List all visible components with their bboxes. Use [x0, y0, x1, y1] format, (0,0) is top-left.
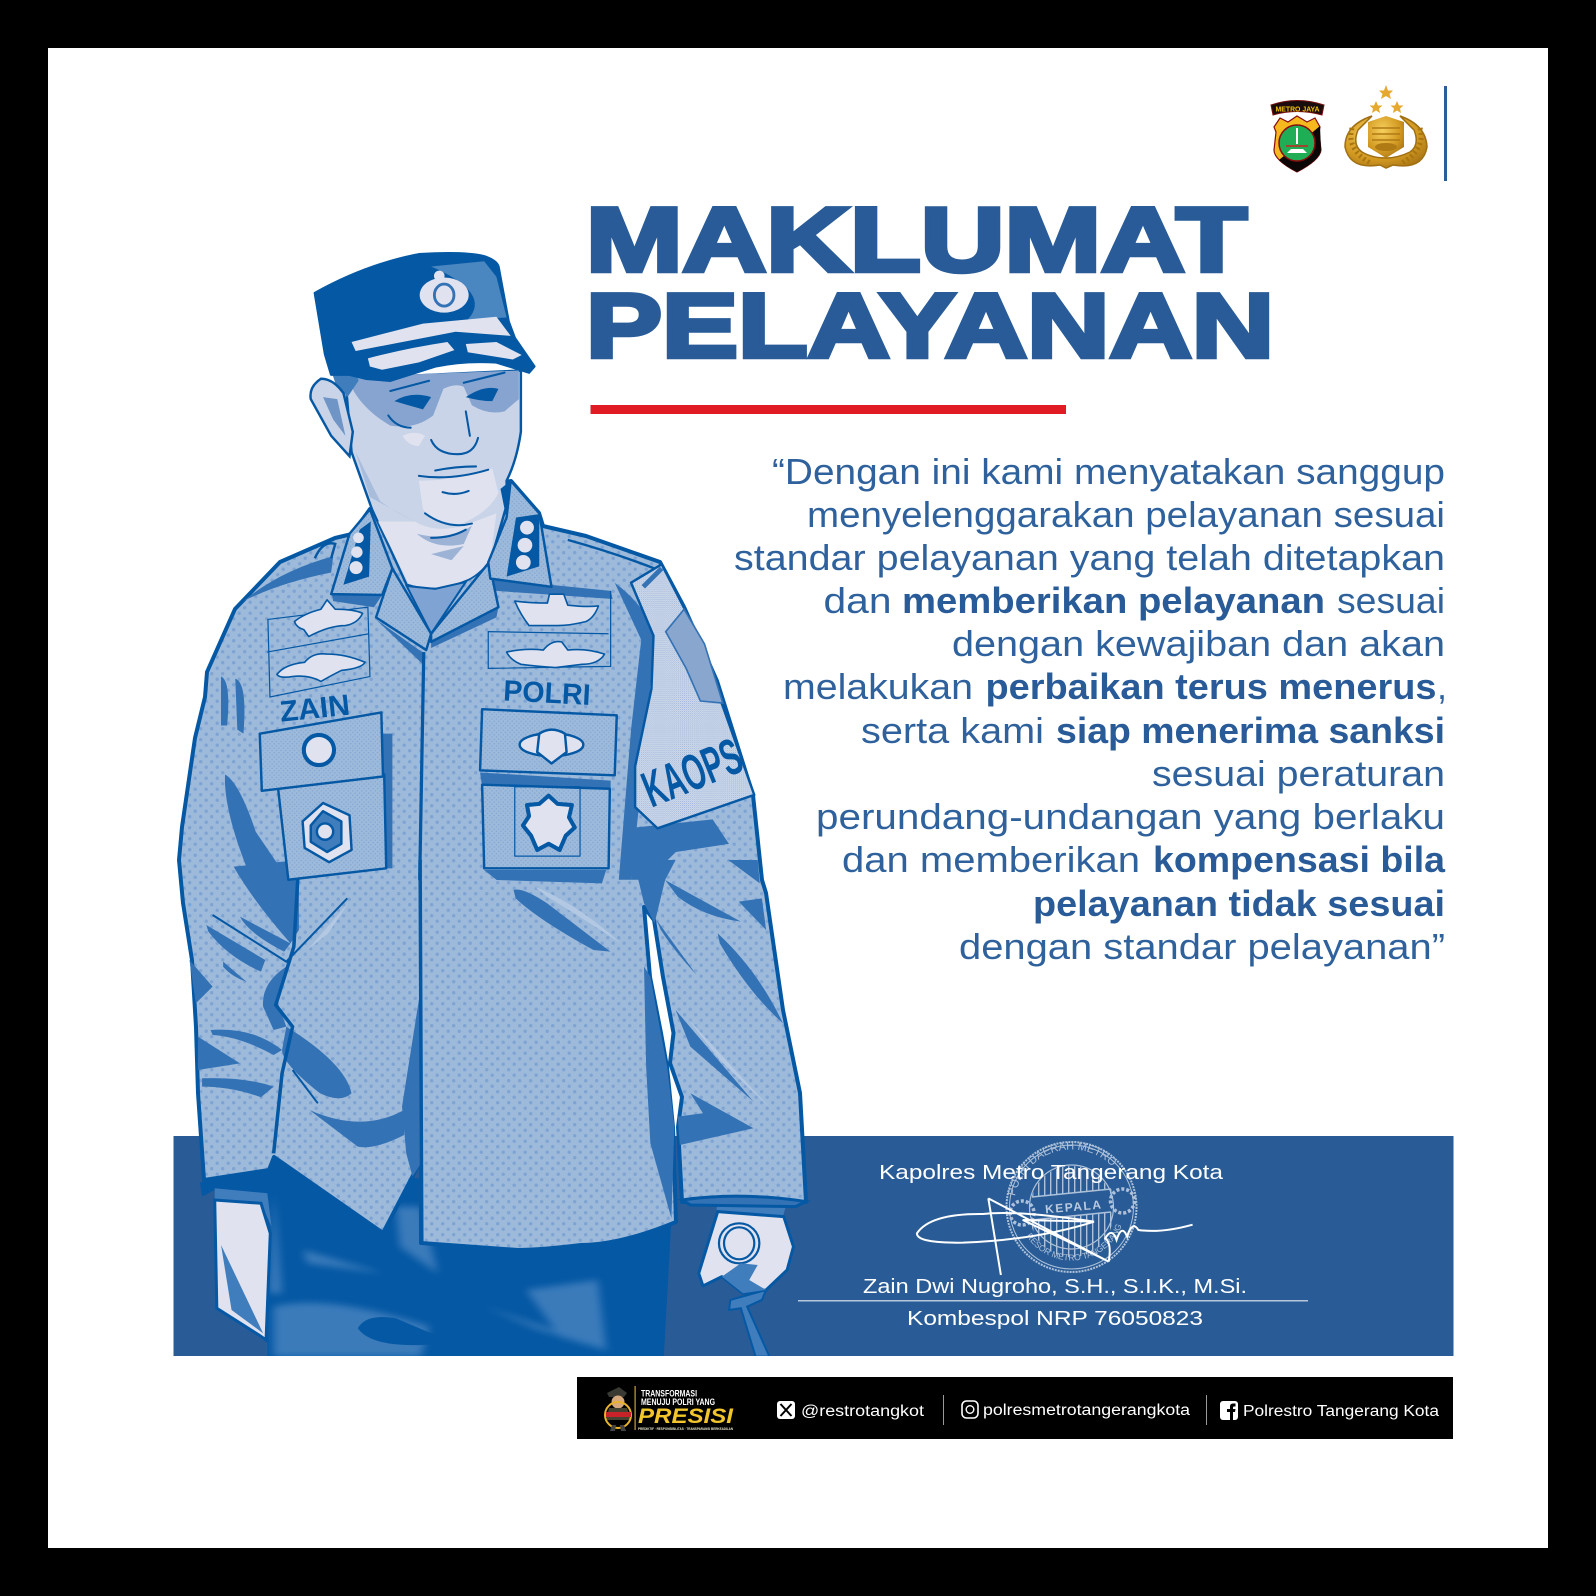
chest boxes [267, 591, 611, 697]
stamp: KEPALA [1044, 1198, 1102, 1216]
blue signature banner [174, 1136, 1454, 1356]
quote text: dan memberikan [842, 839, 1140, 880]
signature block [798, 1141, 1308, 1330]
icon: Polri crest with three stars [1345, 85, 1427, 168]
stamp [1006, 1141, 1138, 1273]
lower shirt folds and hands [189, 860, 806, 1357]
armband: KAOPS [634, 727, 750, 818]
upper body details [221, 253, 754, 880]
right pocket [480, 709, 617, 868]
Presisi badge: PRESISI [638, 1405, 734, 1428]
icon: Metro Jaya shield: METRO JAYA [1276, 104, 1320, 114]
quote text: perbaikan terus menerus [986, 666, 1436, 707]
placket [420, 652, 424, 880]
cap [315, 253, 534, 381]
collar rank pads [343, 514, 539, 585]
shoulder straps [314, 538, 654, 569]
cap emblem [420, 278, 469, 313]
wings [277, 594, 605, 681]
quote text: dengan kewajiban dan akan [952, 623, 1445, 664]
armband [631, 564, 754, 828]
Presisi badge: PREDIKTIF · RESPONSIBILITAS · TRANSPARANSI BERKEADILAN [638, 1426, 733, 1431]
Facebook account: Polrestro Tangerang Kota [1243, 1403, 1439, 1420]
neck and face [345, 371, 521, 589]
left pocket [260, 712, 386, 880]
officer illustration [179, 253, 806, 1357]
title: PELAYANAN [586, 276, 1274, 377]
quote text: , [1437, 666, 1447, 707]
red rule [590, 405, 1066, 414]
quote text: dengan standar pelayanan” [959, 926, 1445, 967]
left hand [215, 1200, 270, 1340]
cane [729, 1290, 769, 1357]
shirt silhouette [179, 481, 806, 1250]
quote text: pelayanan tidak sesuai [1033, 883, 1445, 924]
stamp: RESOR METRO TANGERANG [1027, 1224, 1121, 1260]
facial features [388, 373, 505, 538]
right hand [699, 1212, 793, 1293]
left cuff [200, 1172, 266, 1196]
hair [332, 376, 358, 397]
quote text: dan [824, 580, 892, 621]
Presisi badge: TRANSFORMASI [641, 1388, 697, 1398]
position label: Kapolres Metro Tangerang Kota [879, 1161, 1224, 1184]
right cuff [682, 1196, 806, 1207]
quote text: kompensasi bila [1153, 839, 1446, 880]
Instagram account: polresmetrotangerangkota [983, 1402, 1190, 1419]
pants [265, 1153, 671, 1357]
quote text: serta kami [861, 710, 1044, 751]
collar [331, 481, 551, 650]
name POLRI: POLRI [503, 674, 591, 712]
quote text: siap menerima sanksi [1056, 710, 1445, 751]
Presisi badge [605, 1386, 734, 1431]
quote text [734, 451, 1447, 967]
officer name: Zain Dwi Nugroho, S.H., S.I.K., M.Si. [863, 1275, 1247, 1298]
quote text: sesuai peraturan [1152, 753, 1445, 794]
ear [310, 379, 353, 456]
quote text: “Dengan ini kami menyatakan sanggup [772, 451, 1445, 492]
logos header [1271, 85, 1447, 181]
quote text: menyelenggarakan pelayanan sesuai [807, 494, 1445, 535]
icon: police mascot [605, 1387, 631, 1431]
quote text: standar pelayanan yang telah ditetapkan [734, 537, 1445, 578]
chest shading [221, 556, 729, 880]
quote text: memberikan pelayanan [902, 580, 1325, 621]
signature [917, 1198, 1193, 1275]
name ZAIN: ZAIN [278, 689, 351, 729]
quote text: melakukan [783, 666, 973, 707]
divider bar [1444, 86, 1447, 181]
quote text: sesuai [1337, 580, 1445, 621]
rank: Kombespol NRP 76050823 [907, 1307, 1203, 1330]
title [586, 190, 1274, 377]
stamp: POLRI DAERAH METRO [1008, 1142, 1116, 1196]
X account: @restrotangkot [801, 1403, 925, 1420]
X account [777, 1401, 925, 1420]
Presisi badge: MENUJU POLRI YANG [641, 1397, 715, 1407]
title: MAKLUMAT [586, 190, 1247, 291]
undershirt [407, 582, 466, 634]
rule [798, 1300, 1308, 1302]
social media footer [577, 1377, 1453, 1439]
quote text: perundang-undangan yang berlaku [816, 796, 1445, 837]
icon: Metro Jaya shield [1271, 100, 1324, 172]
